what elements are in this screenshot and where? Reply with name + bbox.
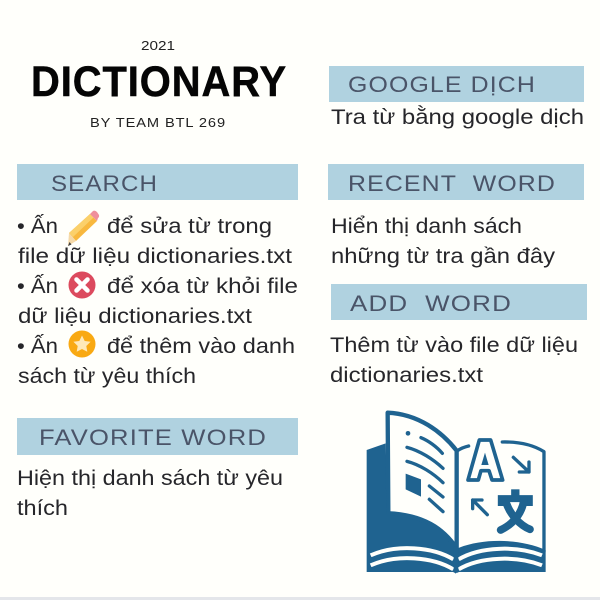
text: search instructions: sách từ yêu thích — [18, 365, 196, 388]
heading bar: google dich — [329, 66, 584, 102]
title: DICTIONARY — [31, 58, 287, 106]
text: add word description: Thêm từ vào file dữ liệu — [330, 334, 578, 357]
text: recent word description: Hiển thị danh sách — [331, 215, 522, 238]
panel: favorite word — [17, 418, 298, 520]
text: search instructions — [17, 215, 298, 388]
text: recent word description: những từ tra gần đây — [331, 245, 556, 268]
heading bar: google dich: GOOGLE DỊCH — [348, 72, 536, 97]
text: search instructions: • Ấn — [17, 275, 58, 298]
heading bar: search: SEARCH — [51, 171, 158, 196]
icon: star favorite — [68, 330, 96, 358]
panel: google dich — [329, 66, 584, 129]
text: favorite word description — [17, 467, 283, 520]
text: search instructions: để thêm vào danh — [107, 335, 295, 358]
text: search instructions: • Ấn — [17, 335, 58, 358]
text: search instructions: • Ấn — [17, 215, 58, 238]
heading bar: search — [17, 164, 298, 200]
text: search instructions: file dữ liệu dictionaries.txt — [18, 245, 292, 268]
text: add word description — [330, 334, 578, 387]
heading bar: add word: ADD WORD — [350, 291, 512, 316]
panel: add word — [330, 284, 587, 387]
text: google dich description: Tra từ bằng google dịch — [331, 106, 584, 129]
panel: recent word — [328, 164, 584, 268]
byline: BY TEAM BTL 269 — [90, 115, 226, 130]
text: add word description: dictionaries.txt — [330, 364, 483, 387]
text: search instructions: để sửa từ trong — [107, 215, 272, 238]
text: search instructions: để xóa từ khỏi file — [107, 275, 298, 298]
icon: translation book — [367, 413, 546, 574]
heading bar: add word — [331, 284, 587, 320]
text: favorite word description: Hiện thị danh sách từ yêu — [17, 467, 283, 490]
year: 2021 — [141, 38, 175, 53]
panel: search — [17, 164, 298, 388]
heading bar: favorite word: FAVORITE WORD — [39, 425, 267, 450]
title block — [31, 38, 287, 130]
text: recent word description — [331, 215, 556, 268]
heading bar: favorite word — [17, 418, 298, 455]
heading bar: recent word: RECENT WORD — [348, 171, 556, 196]
heading bar: recent word — [328, 164, 584, 200]
icon: pencil — [68, 211, 99, 246]
text: favorite word description: thích — [17, 497, 68, 520]
icon: red delete — [68, 272, 96, 298]
text: search instructions: dữ liệu dictionaries.txt — [18, 305, 252, 328]
